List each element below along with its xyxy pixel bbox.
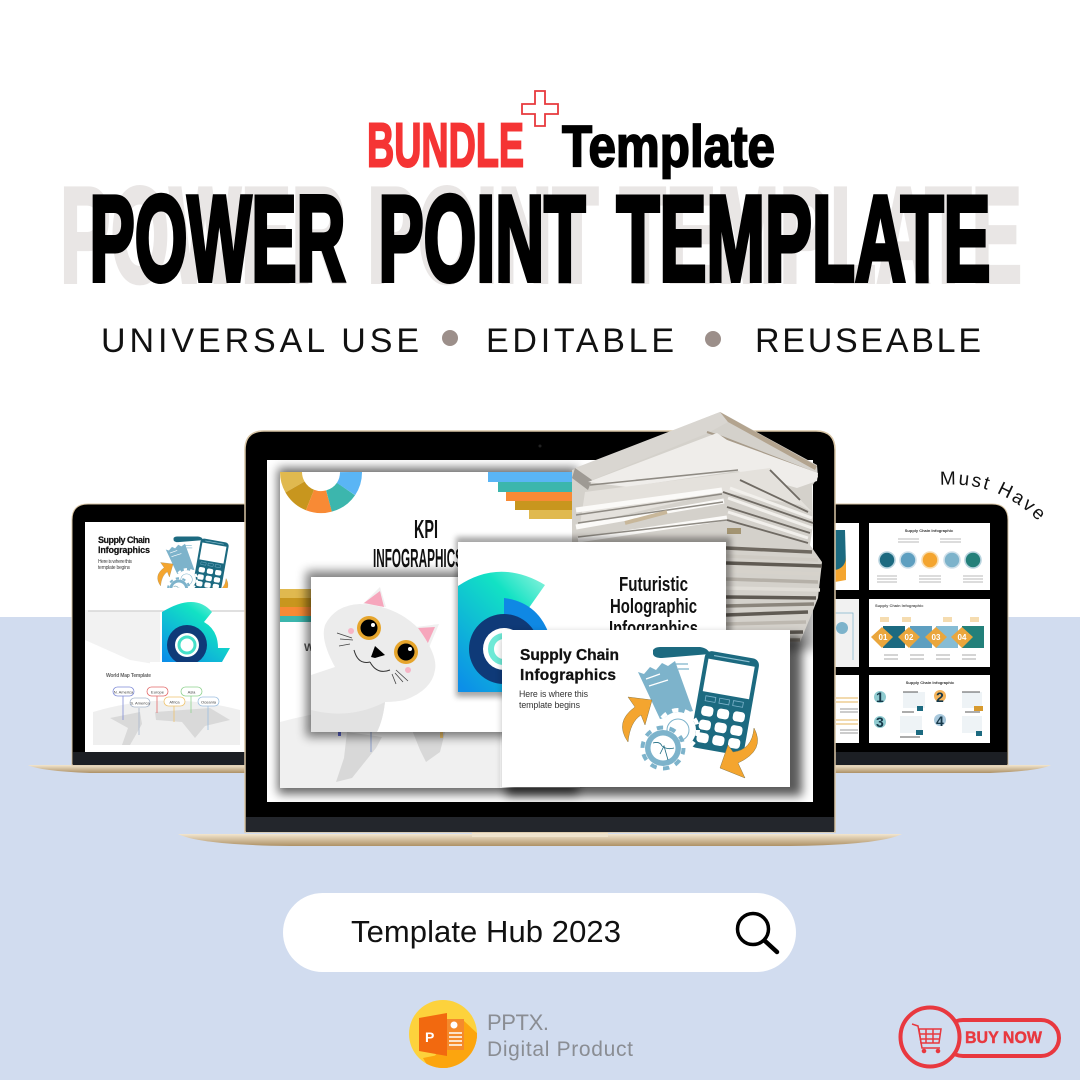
- center laptop base: [178, 834, 902, 846]
- slide 2 title: Supply Chain Infographic: [875, 603, 924, 608]
- search pill: [283, 893, 796, 972]
- map pins: Africa: [169, 700, 180, 704]
- partial left slides: [835, 523, 859, 743]
- cat blush: [348, 628, 411, 673]
- right slide 1: five circles: [869, 523, 990, 590]
- mini slide title: Supply Chain: [98, 535, 150, 545]
- sheet layer bands left: [576, 490, 727, 540]
- background bottom blue: [0, 617, 1080, 1080]
- right slide 3: numbered items: [869, 675, 990, 743]
- icon: powerpoint logo: P: [425, 1029, 434, 1045]
- stair bars: [488, 472, 578, 519]
- slide 1 title: Supply Chain Infographic: [905, 528, 954, 533]
- PPTX label: PPTX.: [487, 1010, 549, 1035]
- stack body: [572, 412, 822, 642]
- map pins: S. America: [130, 700, 150, 706]
- button pill: [945, 1020, 1059, 1056]
- KPI title: KPI: [414, 514, 438, 544]
- dot: [705, 331, 721, 347]
- map pins: [338, 732, 443, 752]
- plus icon: [522, 91, 558, 126]
- futuristic heading line 3: Infographics: [609, 618, 698, 640]
- slide: cat character: [306, 571, 516, 737]
- tagline: [101, 322, 981, 360]
- cat ears: [363, 587, 439, 650]
- supply chain mini slide: [88, 536, 244, 612]
- cat illustration: [311, 587, 439, 732]
- button circle: [900, 1008, 960, 1066]
- map backdrop: [93, 700, 240, 745]
- top roof sheet: [575, 412, 728, 480]
- world map backdrop: [280, 707, 500, 788]
- mini holographic shape: [150, 602, 230, 665]
- futuristic heading line 2: Holographic: [610, 596, 697, 618]
- heading: bundle template: [367, 91, 775, 180]
- cat lower shade: [311, 702, 385, 732]
- supply subtitle line 2: template begins: [519, 700, 581, 710]
- slide: futuristic holographic: [456, 537, 731, 697]
- background top white: [0, 0, 1080, 617]
- futuristic heading line 1: Futuristic: [619, 574, 688, 596]
- supply heading line 1: Supply Chain: [520, 647, 619, 664]
- slide: supply chain: [502, 630, 802, 796]
- right slide 3: numbered items: 4: [936, 713, 944, 729]
- slide 3 title: Supply Chain Infographic: [906, 680, 955, 685]
- title word POWER: POWER: [90, 170, 346, 306]
- supply slide shadow: [506, 636, 802, 796]
- donut chart: [291, 472, 351, 502]
- map landmasses: [336, 730, 445, 782]
- cat slide sheet: [311, 577, 511, 732]
- Template word: Template: [562, 114, 775, 180]
- dot: [442, 330, 458, 346]
- digital product label: Digital Product: [487, 1038, 633, 1061]
- left laptop bezel: [72, 504, 245, 765]
- tagline reuseable: REUSEABLE: [755, 322, 981, 360]
- map landmasses: [110, 708, 230, 745]
- right slide 3: numbered items: 2: [936, 689, 944, 705]
- mini slide title line 2: Infographics: [98, 545, 150, 555]
- map pins: N. America: [114, 690, 134, 694]
- holographic shape: [458, 572, 553, 693]
- right slide 3: numbered items: 3: [876, 714, 884, 730]
- center laptop bezel: [245, 431, 835, 832]
- cat eyes: [357, 616, 418, 664]
- tagline editable: EDITABLE: [486, 322, 674, 360]
- mini supply icon: [157, 536, 229, 588]
- right slide 2: four steps: 03: [932, 633, 941, 642]
- BUNDLE word: BUNDLE: [367, 112, 524, 180]
- cat slide shadow: [306, 571, 516, 737]
- right slide 3: numbered items: 1: [876, 689, 884, 705]
- button text: BUY NOW: [965, 1028, 1043, 1047]
- left colored stack: [280, 589, 320, 622]
- second folded sheet: [588, 433, 818, 488]
- powerpoint badge: [409, 1000, 633, 1070]
- supply subtitle line 1: Here is where this: [519, 689, 589, 699]
- right laptop base: [835, 765, 1051, 773]
- sheet layer lines right: [723, 470, 813, 543]
- search text: Template Hub 2023: [351, 914, 621, 949]
- stack ground shadow: [725, 600, 815, 650]
- futuristic slide sheet: [458, 542, 726, 692]
- bezel strip: [73, 752, 245, 765]
- bezel strip: [835, 752, 1007, 765]
- supply heading line 2: Infographics: [520, 667, 616, 684]
- world map title: World Map Template: [106, 673, 151, 679]
- right slide 2: four steps: 04: [958, 633, 967, 642]
- map pins: [113, 687, 219, 735]
- bezel lower strip: [246, 817, 834, 832]
- supply slide sheet: [502, 630, 790, 787]
- lower newspaper stripes: [726, 548, 822, 640]
- map pins: Europe: [151, 690, 165, 694]
- binder clip: [727, 528, 741, 534]
- center laptop: [178, 431, 902, 846]
- right slide 2: four steps: 02: [905, 633, 914, 642]
- right laptop: [835, 504, 1051, 773]
- search bar: [283, 893, 796, 972]
- right slide 2: four steps: [869, 599, 990, 667]
- left laptop: [28, 504, 245, 773]
- icon: shopping cart: [912, 1024, 941, 1053]
- left laptop base: [28, 765, 245, 773]
- icon: magnifier: [738, 914, 777, 952]
- KPI slide shadow: [278, 468, 578, 794]
- world map heading fragment: W: [304, 642, 315, 654]
- right slide 2: four steps: 01: [879, 633, 888, 642]
- futuristic slide shadow: [456, 537, 731, 697]
- mini slide subtitle line 2: template begins: [98, 565, 130, 571]
- right laptop bezel: [835, 504, 1008, 765]
- third folded sheet: [580, 468, 812, 525]
- mini world map slide: [93, 673, 240, 745]
- slide: KPI infographics: INFOGRAPHICS: [373, 543, 463, 573]
- cat nose and mouth: [354, 646, 390, 671]
- mini slide subtitle: Here is where this: [98, 559, 132, 565]
- buy now button: [900, 1008, 1059, 1066]
- tan page edge: [625, 512, 667, 523]
- supply chain icon: [622, 647, 760, 778]
- roof sheet underside shadow: [572, 468, 592, 490]
- title word POINT: POINT: [378, 170, 586, 306]
- cat whiskers: [337, 633, 408, 684]
- KPI slide sheet: [280, 472, 580, 788]
- title: power point template: [60, 159, 1022, 311]
- icon: powerpoint logo: [409, 1000, 478, 1070]
- left screen: [85, 522, 245, 752]
- left screen grey backdrop: [85, 610, 160, 665]
- cat body and head: [311, 604, 436, 714]
- roof right edge: [720, 412, 817, 470]
- slide: KPI infographics: [278, 468, 580, 794]
- center screen: [267, 460, 813, 802]
- tagline universal use: UNIVERSAL USE: [101, 322, 419, 360]
- map pins: Oceania: [201, 700, 217, 704]
- camera dot: [538, 444, 542, 448]
- base notch: [472, 832, 608, 837]
- map pins: Asia: [188, 690, 196, 694]
- paper stack: [572, 412, 822, 650]
- must have curved label: Must Have: [941, 471, 1044, 520]
